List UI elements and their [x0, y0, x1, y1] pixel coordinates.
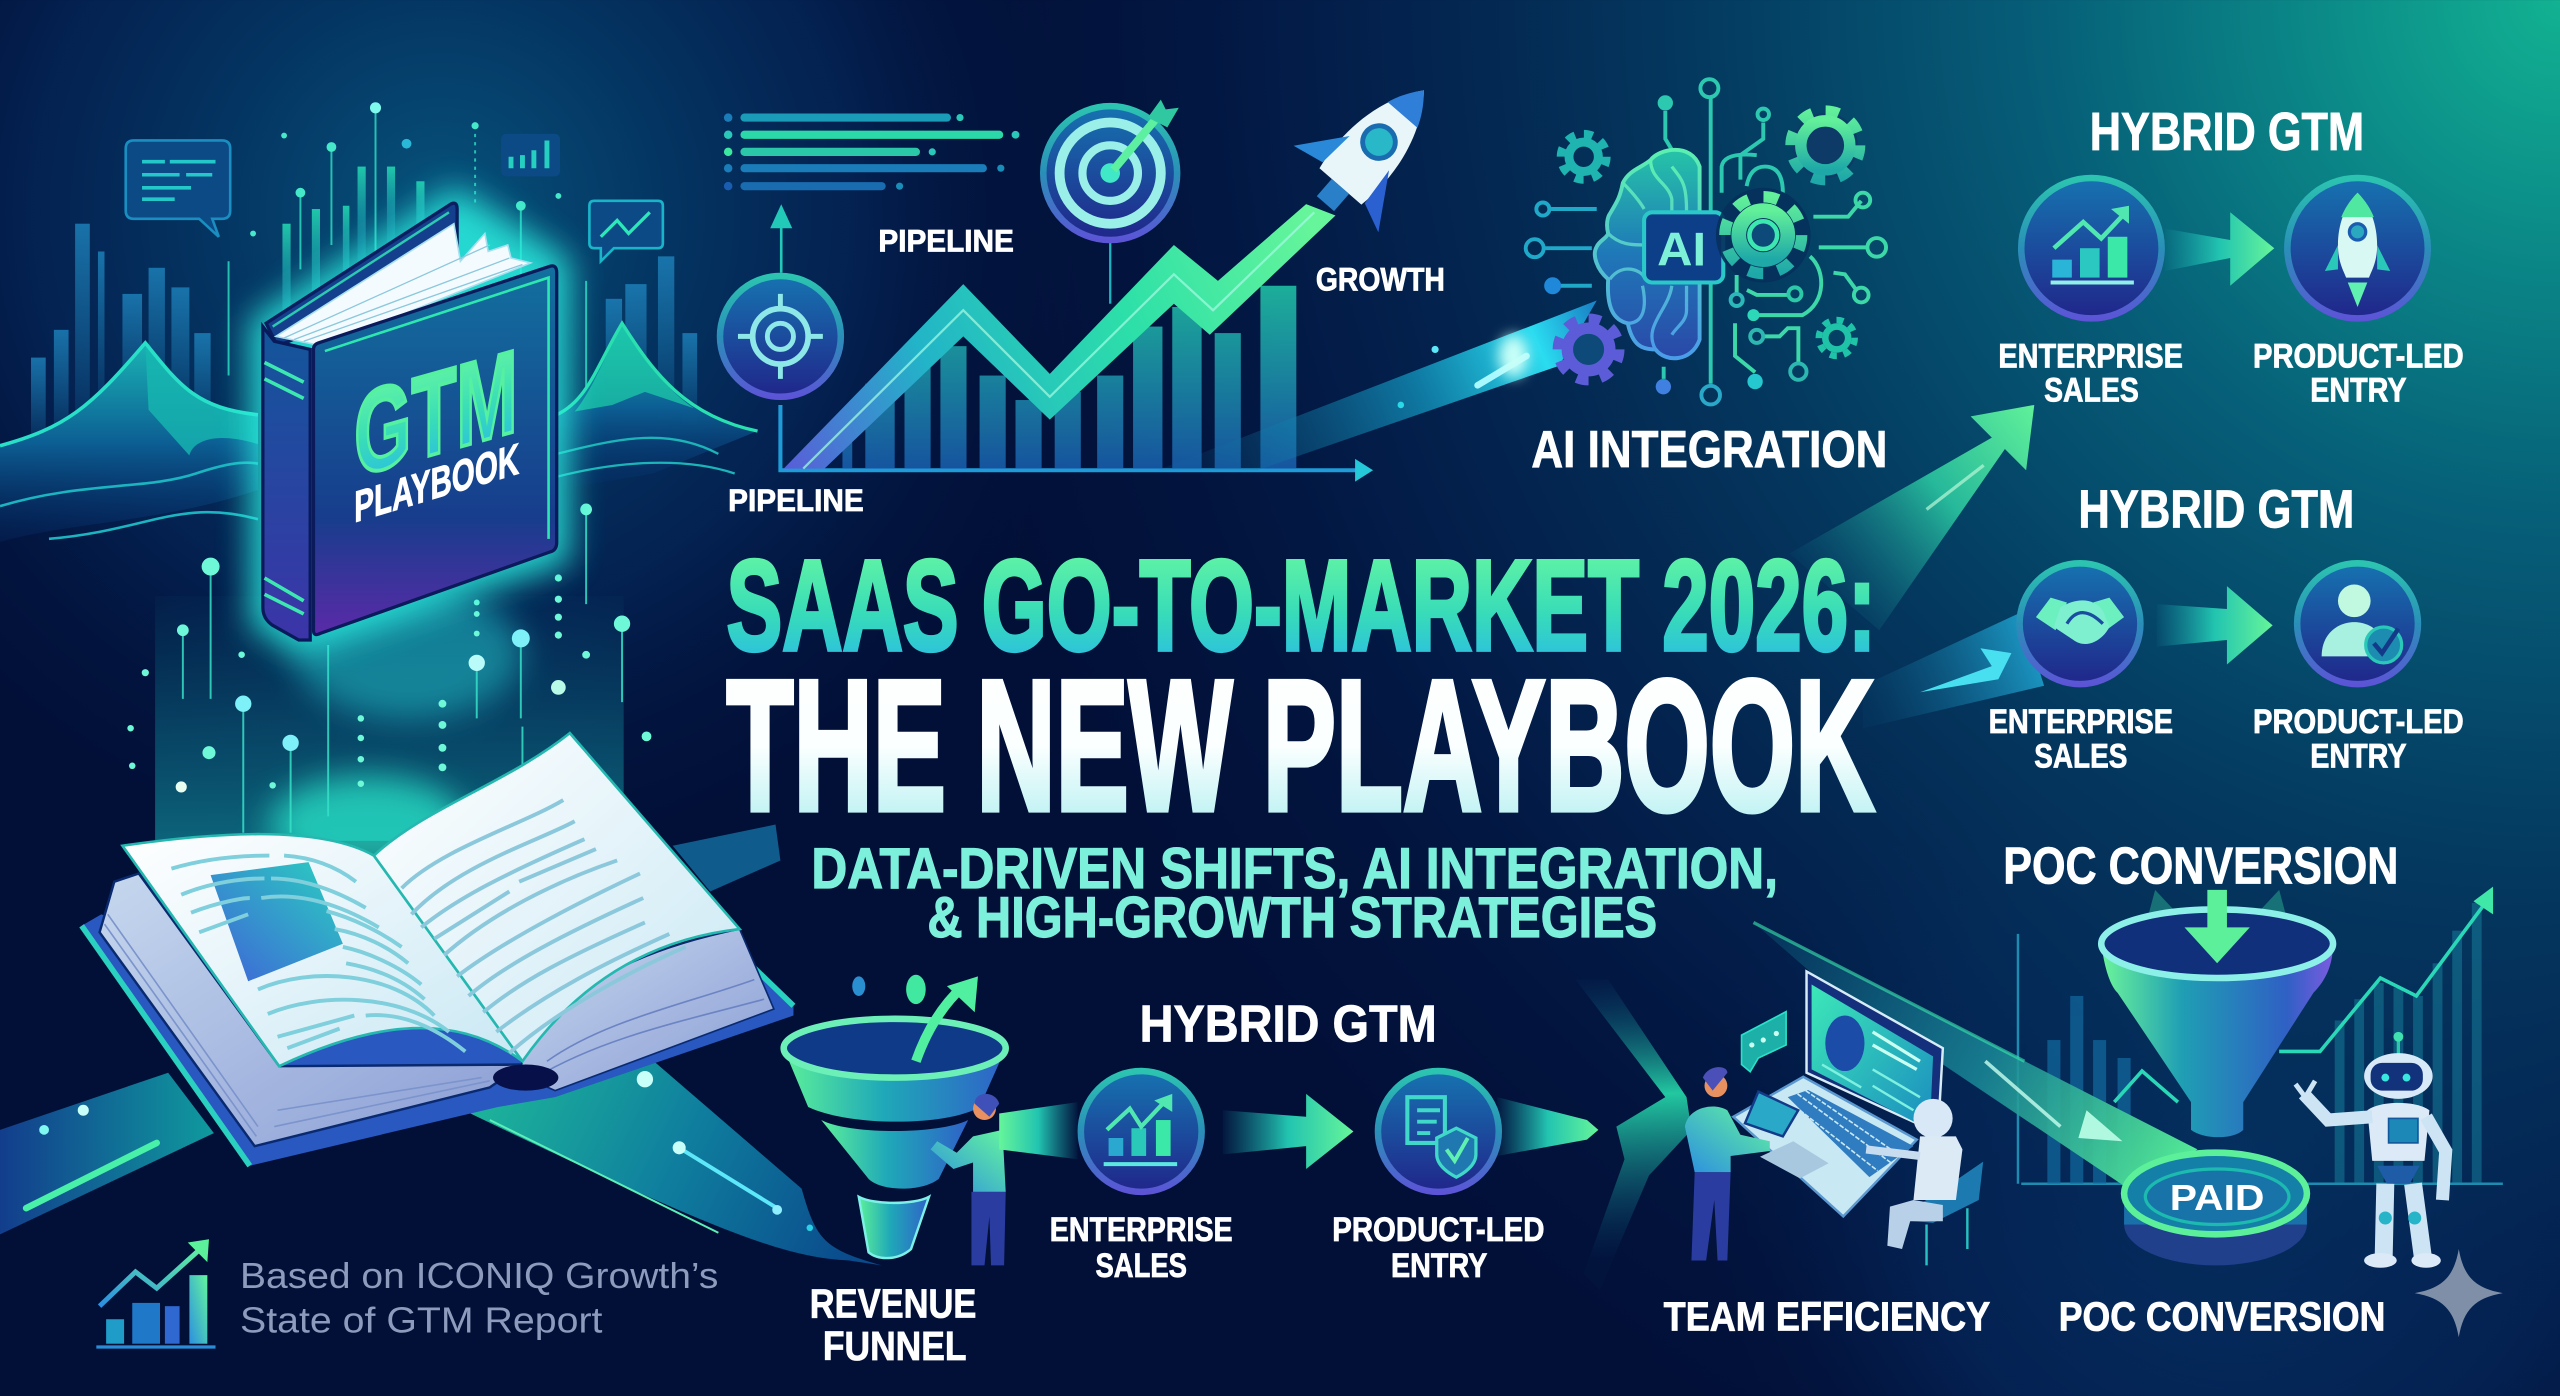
big arrow to Hybrid GTM — [1789, 405, 2034, 630]
central bars — [282, 167, 424, 338]
entry label: ENTRY — [2310, 372, 2407, 410]
keyboard — [1788, 1090, 1913, 1177]
cover subtitle: PLAYBOOK — [354, 433, 519, 532]
badge: enterprise chart — [2021, 178, 2162, 318]
bullseye target — [1043, 100, 1179, 240]
sparkle star — [2415, 1249, 2503, 1337]
pins — [229, 108, 586, 408]
bar columns — [842, 286, 1296, 469]
icon: bar chart card — [501, 134, 560, 176]
hybrid GTM panel three — [999, 996, 1598, 1285]
rocket — [1279, 50, 1468, 242]
heading: POC CONVERSION — [2003, 837, 2398, 895]
arrow — [2165, 212, 2274, 286]
funnel top — [784, 1048, 1006, 1122]
source text line 2: State of GTM Report — [240, 1299, 602, 1340]
list lines — [744, 118, 999, 186]
arrow — [1223, 1094, 1353, 1169]
open book — [82, 733, 793, 1166]
rim — [2101, 909, 2333, 978]
sales label: SALES — [1096, 1247, 1187, 1285]
back cover — [266, 203, 457, 346]
icon: growth chart — [96, 1239, 216, 1347]
heading: HYBRID GTM — [2078, 479, 2354, 539]
cover — [313, 266, 557, 635]
gear: top left — [1561, 134, 1607, 180]
badge: rocket — [2287, 178, 2428, 318]
left page — [122, 834, 522, 1066]
zigzag growth ribbon — [784, 204, 1336, 469]
hybrid GTM panel two — [1989, 479, 2464, 775]
person — [1685, 1067, 1798, 1260]
person — [931, 1094, 1006, 1265]
cover edges — [82, 926, 793, 1166]
title line 1: SAAS GO-TO-MARKET 2026: — [727, 534, 1876, 678]
cone — [2101, 944, 2333, 1137]
light bands behind open book — [0, 825, 882, 1265]
hybrid GTM panel one — [1998, 102, 2464, 410]
brain folds — [1608, 160, 1687, 349]
funnel spout — [859, 1197, 929, 1258]
left block stripes — [104, 914, 490, 1136]
closed book: GTM Playbook — [263, 202, 557, 640]
axes — [780, 405, 1358, 470]
source text line 1: Based on ICONIQ Growth’s — [240, 1255, 718, 1296]
glowing dots — [127, 504, 651, 793]
data stream under book — [127, 504, 651, 874]
gears — [1558, 111, 1860, 380]
gear: top right — [1791, 111, 1860, 180]
spine notch — [493, 1065, 558, 1091]
mountains — [0, 343, 258, 542]
team efficiency label: TEAM EFFICIENCY — [1664, 1294, 1990, 1340]
robot assistant — [2296, 1032, 2446, 1268]
arrow — [2157, 586, 2273, 665]
entry label: ENTRY — [2310, 737, 2407, 775]
GROWTH label: GROWTH — [1316, 261, 1445, 298]
funnel label: FUNNEL — [823, 1323, 967, 1369]
circuits right — [1656, 193, 1886, 394]
tablet — [1745, 1092, 1798, 1136]
badge: document shield — [1378, 1071, 1499, 1192]
pin dots — [250, 102, 561, 236]
product-led label: PRODUCT-LED — [1332, 1211, 1544, 1249]
book glow — [263, 202, 557, 640]
sales label: SALES — [2044, 372, 2139, 410]
laptop screen — [1807, 971, 1943, 1133]
enterprise label: ENTERPRISE — [1050, 1211, 1233, 1249]
heading: HYBRID GTM — [1140, 996, 1437, 1054]
AI INTEGRATION label: AI INTEGRATION — [1531, 421, 1887, 479]
team flow ribbon — [1576, 980, 1691, 1290]
laptop base — [1733, 1077, 1917, 1216]
circuits left and top — [1526, 79, 1783, 404]
badge: trend chart — [1081, 1071, 1202, 1192]
list dots — [724, 113, 1019, 190]
footer source note — [96, 1239, 718, 1347]
heading: HYBRID GTM — [2090, 102, 2364, 162]
pipeline growth chart — [720, 50, 1468, 518]
enterprise label: ENTERPRISE — [1989, 703, 2173, 741]
gear: purple — [1558, 318, 1620, 380]
AI chip — [1644, 212, 1723, 282]
badge: handshake — [2020, 563, 2140, 684]
gear: small — [1819, 320, 1855, 356]
subtitle line 2: & HIGH-GROWTH STRATEGIES — [927, 886, 1657, 950]
main title — [727, 534, 1876, 950]
cover title: GTM — [354, 325, 518, 502]
page picture — [211, 862, 343, 981]
badge: user check — [2297, 563, 2418, 684]
revenue label: REVENUE — [810, 1281, 976, 1327]
product-led label: PRODUCT-LED — [2253, 337, 2464, 375]
team efficiency scene — [1685, 971, 1983, 1265]
target stem — [1109, 240, 1111, 304]
entry label: ENTRY — [1391, 1247, 1487, 1285]
left page text lines — [171, 856, 465, 1051]
PIPELINE label B: PIPELINE — [728, 482, 864, 518]
bar chart skyline — [31, 224, 697, 449]
PIPELINE label A: PIPELINE — [878, 222, 1014, 258]
growth arrow — [916, 986, 963, 1061]
page block left — [100, 874, 522, 1146]
gear: AI center — [1716, 188, 1811, 282]
AI comet beam — [1158, 300, 1597, 470]
spine — [263, 327, 310, 640]
green conversion band — [1753, 922, 2198, 1187]
right page text lines — [402, 800, 686, 1053]
right block stripes — [536, 980, 764, 1078]
enterprise label: ENTERPRISE — [1998, 337, 2183, 375]
light pins — [183, 509, 622, 833]
up arrow — [772, 207, 790, 273]
PAID text: PAID — [2170, 1177, 2264, 1218]
funnel middle — [821, 1120, 968, 1189]
POC chart backdrop — [2018, 887, 2503, 1184]
AI chip text: AI — [1657, 223, 1706, 276]
book cover — [82, 914, 793, 1166]
touchpad — [1760, 1141, 1829, 1178]
down arrow — [2184, 890, 2250, 963]
right page — [374, 733, 740, 1061]
PAID button — [2124, 1153, 2307, 1265]
connector to team — [1497, 1097, 1598, 1156]
beams — [2142, 890, 2292, 939]
product-led label: PRODUCT-LED — [2253, 703, 2464, 741]
POC conversion funnel — [2003, 837, 2398, 1137]
subtitle line 1: DATA-DRIVEN SHIFTS, AI INTEGRATION, — [811, 837, 1778, 901]
funnel connector — [999, 1102, 1078, 1159]
blue arrow to handshake badge — [1863, 612, 2044, 728]
flowing dots — [877, 1017, 900, 1043]
pages — [276, 224, 531, 346]
icon: speech bubble — [126, 140, 230, 237]
brain — [1595, 150, 1700, 358]
left skyline data visual — [0, 102, 758, 542]
speech bubble — [1742, 1012, 1786, 1072]
AI brain icon — [1526, 79, 1886, 404]
POC conversion bottom label: POC CONVERSION — [2059, 1294, 2385, 1340]
seated robot — [1866, 1099, 1983, 1265]
sales label: SALES — [2034, 737, 2127, 775]
icon: trend bubble — [589, 201, 663, 261]
revenue funnel — [784, 975, 1006, 1265]
target badge — [720, 276, 841, 397]
page block right — [519, 929, 774, 1091]
